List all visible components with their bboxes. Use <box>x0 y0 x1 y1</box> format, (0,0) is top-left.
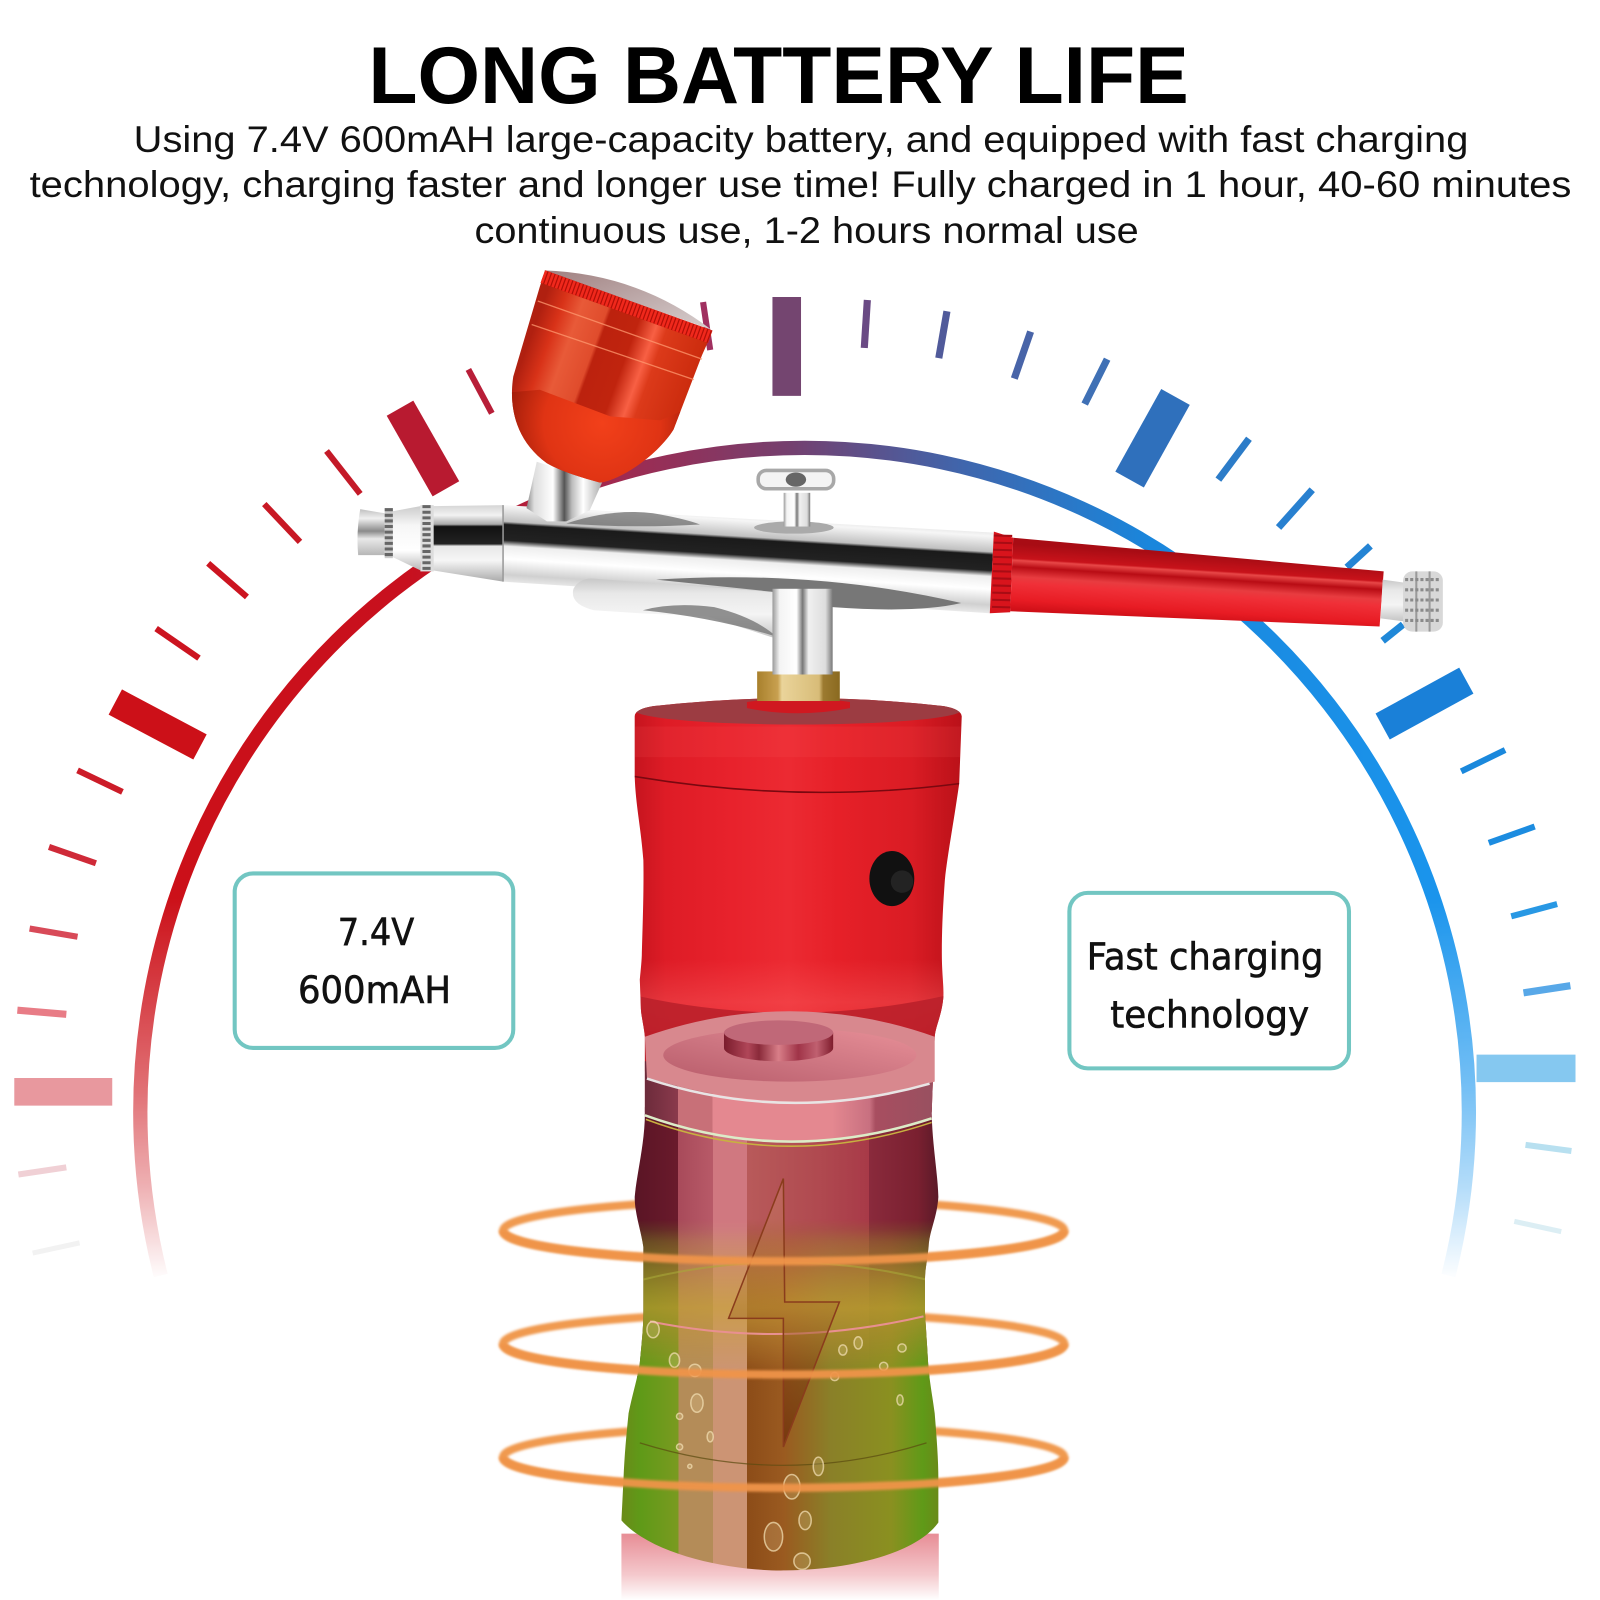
paint cup <box>505 270 711 490</box>
liquid surface <box>643 1262 927 1280</box>
charging rings, back <box>503 1200 1064 1488</box>
callout: battery spec: 600mAH <box>298 968 451 1012</box>
shadow wedge under neck <box>566 512 700 526</box>
front cone <box>393 506 420 570</box>
battery top band <box>644 1061 933 1140</box>
compressor base with battery overlay <box>612 684 969 1600</box>
red compressor body <box>634 698 962 1112</box>
cup neck <box>527 462 602 521</box>
lower seam and pink line <box>640 1316 927 1465</box>
rear steel sleeve <box>1381 580 1404 621</box>
barrel front section <box>433 505 503 582</box>
base reflection <box>621 1534 939 1600</box>
callout: battery spec <box>235 873 513 1048</box>
gauge tick marks <box>14 297 1576 1253</box>
cup side <box>512 278 710 483</box>
cap top face <box>635 696 961 724</box>
trigger grip <box>573 578 784 639</box>
pale battery disc <box>645 1011 935 1101</box>
gauge arc <box>140 448 1469 1276</box>
red tail <box>1010 538 1384 627</box>
knurled front rings <box>385 505 434 571</box>
darker band under highlight <box>633 995 949 1071</box>
airbrush <box>357 270 1443 713</box>
cup lid top <box>544 270 711 330</box>
battery positive nub <box>724 1020 833 1061</box>
brass fitting <box>757 671 840 701</box>
grey underside of barrel <box>656 577 961 609</box>
lower body highlight <box>640 972 944 1012</box>
knurled knob <box>1403 571 1443 632</box>
knurled rim <box>543 277 710 337</box>
cap seam <box>635 777 959 792</box>
stem <box>772 589 833 674</box>
bubbles <box>647 1321 906 1569</box>
title: LONG BATTERY LIFE <box>368 31 1189 121</box>
nozzle tip <box>357 509 385 555</box>
cup bowl <box>512 390 680 482</box>
icon: lightning bolt <box>729 1179 839 1447</box>
cup grooves <box>532 301 702 380</box>
callout: battery spec: 7.4V <box>338 910 414 954</box>
description text <box>30 119 1571 251</box>
cap highlight band <box>612 727 969 757</box>
needle button <box>754 470 834 534</box>
maroon battery section <box>634 1107 938 1378</box>
red tail ring <box>990 532 1013 613</box>
red collar <box>747 698 850 713</box>
description text: continuous use, 1-2 hours normal use <box>474 210 1139 251</box>
inner disc <box>663 1029 916 1082</box>
yellow transition band <box>640 1240 929 1364</box>
green lower section <box>622 1224 938 1570</box>
callout: fast charging: Fast charging <box>1087 934 1323 978</box>
main barrel <box>503 505 994 613</box>
description text: technology, charging faster and longer use time! Fully charged in 1 hour, 40-60 minutes <box>30 164 1571 205</box>
battery highlight lines <box>645 1079 932 1146</box>
section seam <box>502 505 504 582</box>
power button <box>869 851 914 906</box>
charging rings, front <box>503 1231 1064 1488</box>
callout: fast charging: technology <box>1110 993 1309 1037</box>
callout: fast charging <box>1069 893 1349 1068</box>
description text: Using 7.4V 600mAH large-capacity battery, and equipped with fast charging <box>134 119 1468 160</box>
